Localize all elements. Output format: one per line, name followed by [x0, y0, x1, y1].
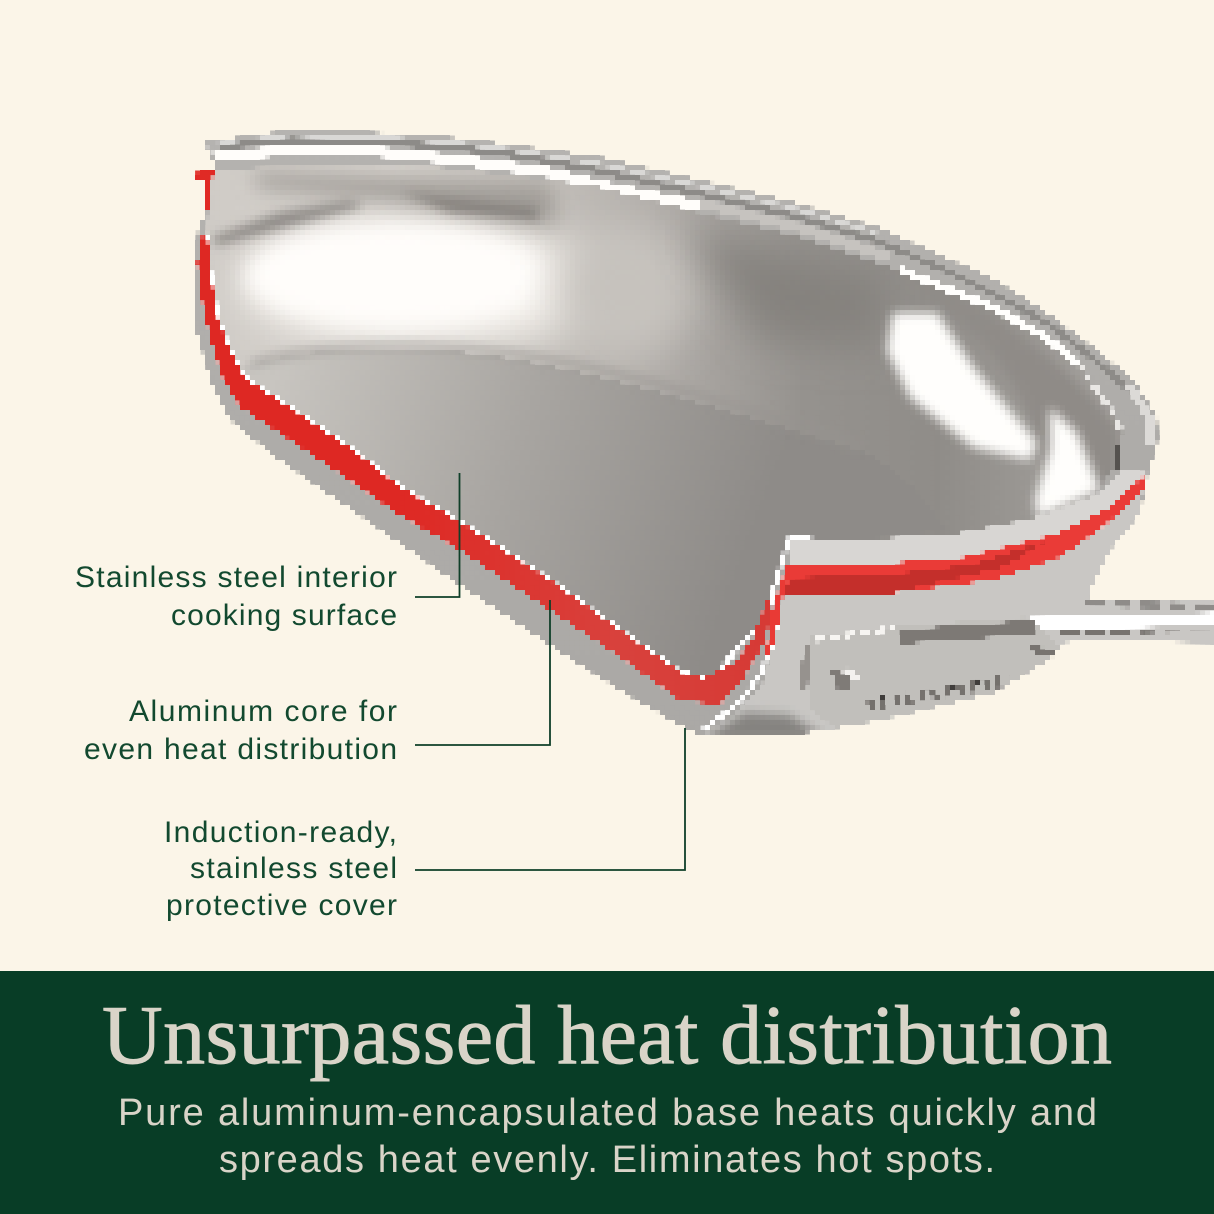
rim glints — [900, 270, 1121, 430]
callout: stainless interior — [75, 473, 460, 632]
label text: Aluminum core for — [129, 695, 397, 728]
illustration: cutaway stainless pan — [193, 132, 1214, 740]
label text: Stainless steel interior — [75, 561, 397, 594]
pan outer stainless shell — [193, 132, 1158, 735]
lower lip above red core — [790, 470, 1148, 567]
callout: aluminum core: even heat distribution — [84, 733, 397, 766]
footer banner: spreads heat evenly. Eliminates hot spots. — [219, 1139, 995, 1181]
outer white edge by base — [703, 610, 780, 730]
riveted handle plate — [803, 617, 1060, 728]
callout: induction cover: stainless steel — [190, 852, 397, 885]
dark lower fade of shell — [700, 712, 830, 740]
right hot highlight — [887, 313, 1037, 460]
pan interior bowl — [207, 163, 1123, 678]
bowl reflections — [212, 172, 1120, 675]
rim bands — [205, 137, 1150, 445]
subheading: Pure aluminum-encapsulated base heats quickly and — [118, 1092, 1097, 1134]
bowl floor — [240, 350, 795, 675]
inner edge white line — [207, 233, 812, 678]
dark rim notch — [1113, 443, 1122, 471]
leader line — [415, 600, 550, 745]
callout: induction cover — [164, 728, 685, 922]
callout: aluminum core — [84, 600, 550, 766]
footer banner — [0, 971, 1214, 1214]
label text: Induction-ready, — [164, 816, 397, 849]
leader line — [415, 473, 460, 597]
red aluminum core — [195, 170, 1145, 705]
callout: stainless interior: cooking surface — [171, 599, 397, 632]
pan handle — [1030, 600, 1214, 650]
headline: Unsurpassed heat distribution — [102, 989, 1112, 1082]
leader line — [415, 728, 685, 870]
callout: induction cover: protective cover — [166, 889, 397, 922]
shell panel below red core — [700, 490, 1143, 735]
